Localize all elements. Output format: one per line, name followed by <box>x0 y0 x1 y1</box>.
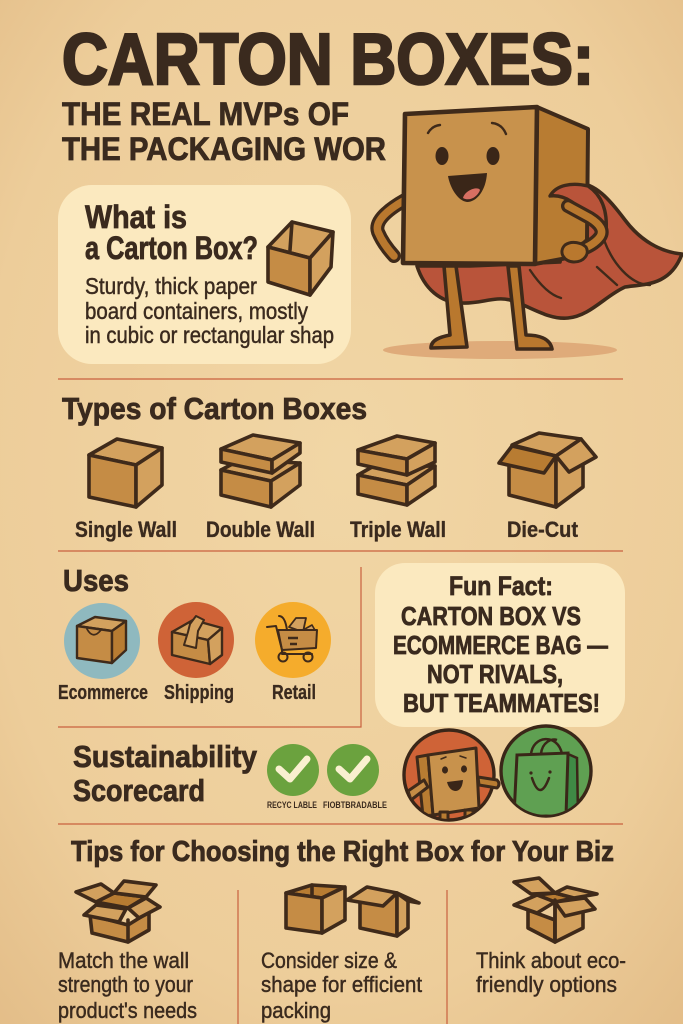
icon: die-cut <box>499 433 596 507</box>
cape curl over the box side <box>550 184 606 232</box>
heading: what is: What is <box>85 199 187 235</box>
badge: recyclable: RECYC LABLE <box>267 800 317 810</box>
tip 3 text: Think about eco- <box>476 948 626 973</box>
badge: biodegradable: FIOBTBRADABLE <box>323 800 387 810</box>
icon: tip box 1 <box>76 881 160 942</box>
heading: sustainability scorecard: Scorecard <box>73 773 205 808</box>
subtitle: THE PACKAGING WOR <box>62 131 386 167</box>
callout: fun fact: NOT RIVALS, <box>427 659 563 689</box>
heading: sustainability scorecard: Sustainability <box>73 739 258 774</box>
title: CARTON BOXES: <box>62 20 594 100</box>
icon: triple wall <box>358 436 435 505</box>
type labels: Single Wall <box>75 517 177 542</box>
right arm <box>568 206 602 250</box>
description <box>85 273 334 348</box>
icon: tip box 3 <box>514 878 597 942</box>
tip 3 text <box>476 948 626 997</box>
tip 2 text: packing <box>261 998 331 1023</box>
heading: tips: Tips for Choosing the Right Box for Your Biz <box>71 836 614 868</box>
type labels: Die-Cut <box>507 517 579 542</box>
use labels: Retail <box>272 682 316 704</box>
use labels: Ecommerce <box>58 682 148 704</box>
callout: fun fact: ECOMMERCE BAG — <box>393 630 608 660</box>
tip 2 text <box>261 948 422 1023</box>
use labels <box>58 682 316 704</box>
heading: types: Types of Carton Boxes <box>62 391 367 426</box>
tip 2 text: shape for efficient <box>261 972 422 997</box>
subtitle: THE REAL MVPs OF <box>62 96 349 132</box>
tip 3 text: friendly options <box>476 972 617 997</box>
description: Sturdy, thick paper <box>85 273 257 299</box>
heading: what is <box>85 199 258 266</box>
heading: sustainability scorecard <box>73 739 258 808</box>
icon: double wall <box>221 435 300 507</box>
callout: fun fact: CARTON BOX VS <box>401 601 581 631</box>
badge: recyclable <box>267 744 319 810</box>
tip 1 text: strength to your <box>58 972 193 997</box>
type labels: Triple Wall <box>350 517 446 542</box>
icon: open box <box>268 222 333 295</box>
callout: fun fact: BUT TEAMMATES! <box>403 688 600 718</box>
tip 1 text <box>58 948 197 1023</box>
left arm <box>377 200 405 256</box>
subtitle <box>62 96 386 167</box>
type labels <box>75 517 579 542</box>
tip 1 text: Match the wall <box>58 948 189 973</box>
icon: box character <box>404 730 499 822</box>
panel: what is a carton box <box>58 185 351 364</box>
heading: uses: Uses <box>63 563 129 598</box>
tip 2 text: Consider size & <box>261 948 397 973</box>
icon: ecommerce <box>64 603 140 679</box>
mascot: caped carton box <box>377 107 682 359</box>
callout: fun fact: Fun Fact: <box>449 571 553 601</box>
icon: ecommerce bag character <box>501 726 591 816</box>
icon: tip boxes 2 <box>286 885 419 936</box>
heading: what is: a Carton Box? <box>85 230 258 266</box>
type labels: Double Wall <box>206 517 315 542</box>
badge: biodegradable <box>323 744 387 810</box>
icon: shipping <box>158 602 234 678</box>
description: in cubic or rectangular shap <box>85 322 334 348</box>
use labels: Shipping <box>164 682 234 704</box>
icon: retail cart <box>255 602 331 678</box>
icon: single wall <box>89 439 162 507</box>
description: board containers, mostly <box>85 298 308 324</box>
callout: fun fact <box>375 563 625 727</box>
tip 1 text: product's needs <box>58 998 197 1023</box>
